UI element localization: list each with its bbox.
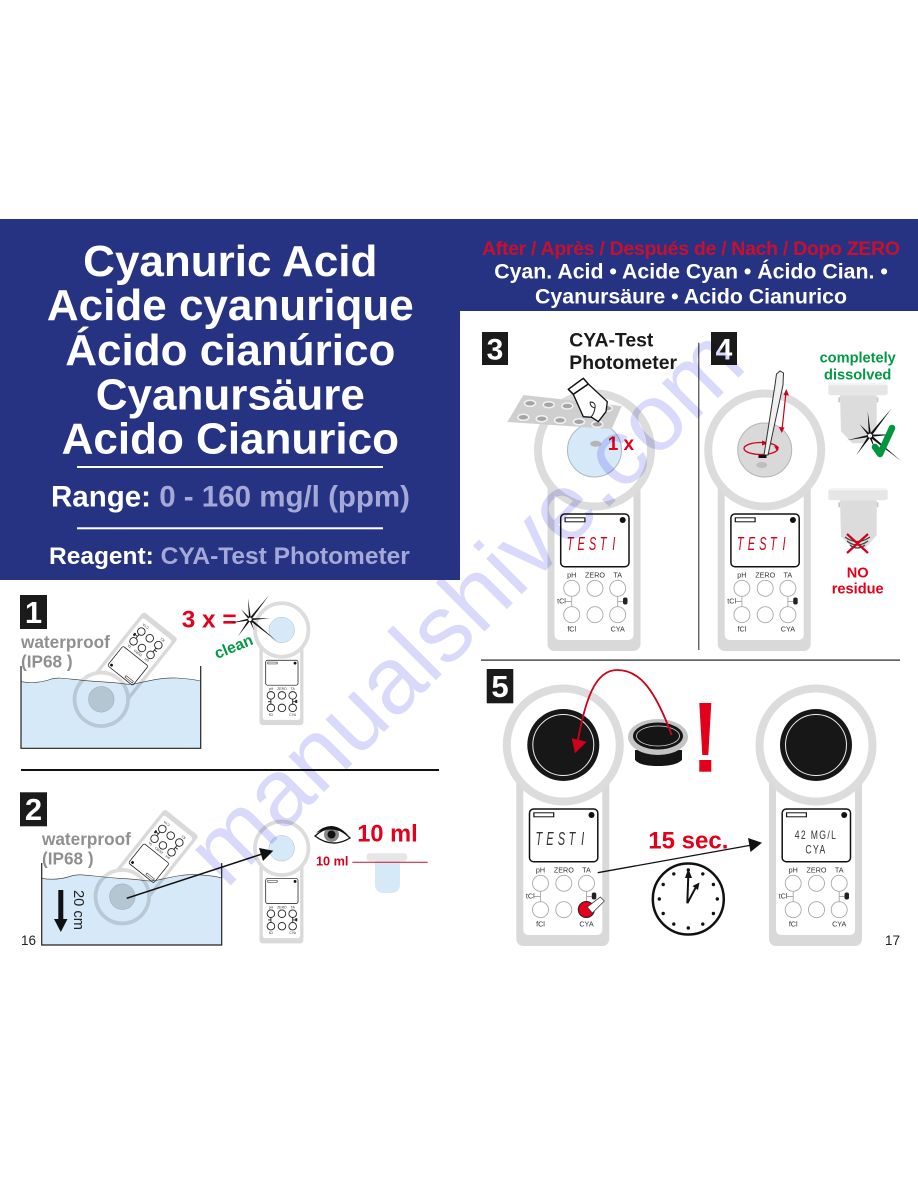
step 4 meter: fCl	[738, 625, 747, 634]
title: Acide cyanurique	[47, 281, 414, 330]
icon: stirring rod	[758, 371, 784, 458]
step 4 meter	[708, 394, 821, 651]
10 ml heading: 10 ml	[357, 822, 418, 848]
step 2 tilted meter in water	[42, 806, 222, 945]
20 cm label: 20 cm	[70, 890, 86, 930]
10 ml small label: 10 ml	[316, 855, 348, 869]
step 2 number badge	[20, 792, 47, 827]
title: Ácido cianúrico	[65, 325, 395, 375]
step 5 left meter: fCl	[536, 920, 545, 929]
step 1 upright meter: fCl	[269, 713, 273, 717]
step 1 waterproof label: waterproof	[20, 632, 110, 652]
step 2 number badge: 2	[25, 792, 42, 827]
depth arrow	[54, 890, 68, 932]
icon: green check	[875, 428, 892, 454]
step 5 right meter: fCl	[789, 920, 798, 929]
step 1 tilted meter in water	[21, 608, 201, 748]
completely dissolved label: dissolved	[824, 367, 891, 383]
NO residue label: residue	[832, 582, 884, 598]
cuvette with residue	[828, 488, 888, 548]
step 2 tilted meter in water: fCl	[181, 834, 187, 840]
step 1 tilted meter in water: TA	[126, 643, 133, 649]
step 4 meter: tCl	[727, 597, 736, 606]
step 5 number badge	[487, 669, 513, 704]
after zero line: After / Après / Después de / Nach / Dopo ZERO	[482, 238, 900, 260]
step 3 meter: TA	[613, 570, 622, 579]
icon: eye	[315, 826, 350, 843]
step 4 meter: CYA	[781, 625, 795, 634]
step 2 upright meter: ZERO	[277, 906, 287, 910]
step 1 tilted meter in water: ZERO	[133, 648, 143, 657]
step 1 upright meter: TA	[291, 687, 295, 691]
step 4 panel	[708, 332, 901, 651]
step 5 right meter: ZERO	[807, 865, 827, 874]
step 3 number badge	[482, 332, 508, 366]
step 1 upright meter	[255, 603, 308, 725]
step 3 meter	[538, 394, 651, 651]
15 sec label: 15 sec.	[648, 827, 728, 854]
step 5 left meter: tCl	[526, 892, 535, 901]
arrow to meter	[127, 848, 273, 898]
right header panel	[460, 219, 918, 311]
title: Cyanursäure	[96, 370, 365, 419]
step 4 meter: pH	[737, 570, 747, 579]
step 5 right meter: CYA	[805, 844, 827, 857]
step 2 waterproof label: waterproof	[41, 829, 131, 849]
step 3 number badge: 3	[487, 334, 503, 366]
step 2 panel	[20, 792, 428, 945]
step 3 panel	[482, 330, 677, 651]
step 3 meter: CYA	[611, 625, 625, 634]
step 5 right meter: pH	[789, 865, 798, 874]
step 5 right meter: tCl	[779, 892, 788, 901]
icon: residue crossed	[845, 534, 870, 553]
step 2 upright meter	[255, 822, 308, 943]
step 1 clean label: clean	[212, 632, 256, 663]
step 5 left meter: ZERO	[554, 865, 574, 874]
step 1 upright meter: pH	[269, 687, 274, 691]
step 1 upright meter: CYA	[289, 713, 297, 717]
reagent label: Photometer	[569, 352, 677, 374]
range: Range: 0 - 160 mg/l (ppm)	[51, 481, 410, 514]
up down arrow	[779, 389, 789, 433]
step 1 upright meter: ZERO	[277, 687, 287, 691]
page number 16: 16	[21, 933, 36, 948]
step 5 right meter	[760, 688, 872, 946]
step 2 tilted meter in water: TA	[147, 840, 154, 846]
step 1 3x equals: 3 x =	[182, 607, 237, 634]
step 3 meter: ZERO	[585, 570, 605, 579]
page number 17: 17	[885, 933, 900, 948]
step 2 waterproof label: (IP68 )	[42, 848, 94, 868]
sparkle	[847, 408, 901, 461]
icon: clock	[653, 864, 724, 934]
step 1 tilted meter in water: CYA	[141, 622, 150, 630]
icon: cap	[628, 719, 688, 766]
step 1 number badge	[20, 595, 47, 630]
step 2 tilted meter in water: CYA	[162, 819, 171, 827]
NO residue label: NO	[847, 565, 869, 581]
step 1 panel	[20, 595, 308, 748]
step 2 upright meter: fCl	[269, 931, 273, 935]
step 2 tilted meter in water: pH	[164, 854, 171, 860]
step 3 meter: pH	[567, 570, 576, 579]
step 1 tilted meter in water: fCl	[160, 637, 166, 643]
title: Acido Cianurico	[62, 415, 399, 464]
step 5 panel	[487, 669, 872, 946]
step 5 number badge: 5	[491, 669, 509, 704]
watermark: manualshive.com	[166, 307, 764, 905]
reagent label: CYA-Test	[569, 330, 654, 352]
red curved arrow	[572, 670, 672, 753]
step 4 number badge	[711, 332, 737, 366]
subtitle: Cyanursäure • Acido Cianurico	[535, 285, 847, 309]
stirring motion arrow	[744, 440, 779, 454]
icon: gloved hand	[568, 378, 607, 422]
step 5 left meter: TESTI	[535, 829, 585, 850]
step 1 number badge: 1	[25, 595, 42, 630]
divider right	[481, 660, 900, 661]
step 2 upright meter: CYA	[289, 931, 297, 935]
arrow to result	[598, 838, 762, 873]
step 2 tilted meter in water: ZERO	[154, 846, 164, 855]
step 2 upright meter: TA	[291, 906, 295, 910]
step 3 meter: TESTI	[567, 534, 616, 555]
step 4 meter: ZERO	[755, 570, 776, 579]
1 x label: 1 x	[608, 434, 635, 455]
step 4 number badge: 4	[716, 334, 733, 366]
step 5 left meter	[507, 688, 620, 946]
step 5 left meter: TA	[582, 865, 591, 874]
step 1 waterproof label: (IP68 )	[21, 651, 73, 671]
step 2 upright meter: pH	[269, 906, 274, 910]
step 4 meter: TA	[784, 570, 792, 579]
title: Cyanuric Acid	[83, 237, 377, 286]
step 5 right meter: 42 MG/L	[795, 830, 837, 842]
reagent: Reagent: CYA-Test Photometer	[49, 543, 410, 570]
step 5 right meter: CYA	[832, 920, 847, 929]
subtitle: Cyan. Acid • Acide Cyan • Ácido Cian. •	[494, 258, 888, 283]
step 3 meter: fCl	[567, 625, 576, 634]
step 5 left meter: pH	[536, 865, 545, 874]
divider left	[21, 769, 439, 771]
step 4 meter: TESTI	[737, 534, 786, 555]
tablet blister pack	[507, 395, 622, 429]
step 3 meter: tCl	[557, 597, 566, 606]
cuvette with 10 ml line	[352, 853, 428, 893]
vertical divider	[698, 343, 699, 650]
cuvette dissolved	[828, 383, 888, 443]
step 1 tilted meter in water: pH	[143, 656, 150, 663]
step 5 left meter: CYA	[579, 920, 594, 929]
step 5 right meter: TA	[835, 865, 844, 874]
step 1 sparkle	[230, 595, 277, 641]
completely dissolved label: completely	[820, 350, 897, 366]
exclamation mark	[699, 703, 711, 772]
left header panel	[0, 219, 460, 580]
